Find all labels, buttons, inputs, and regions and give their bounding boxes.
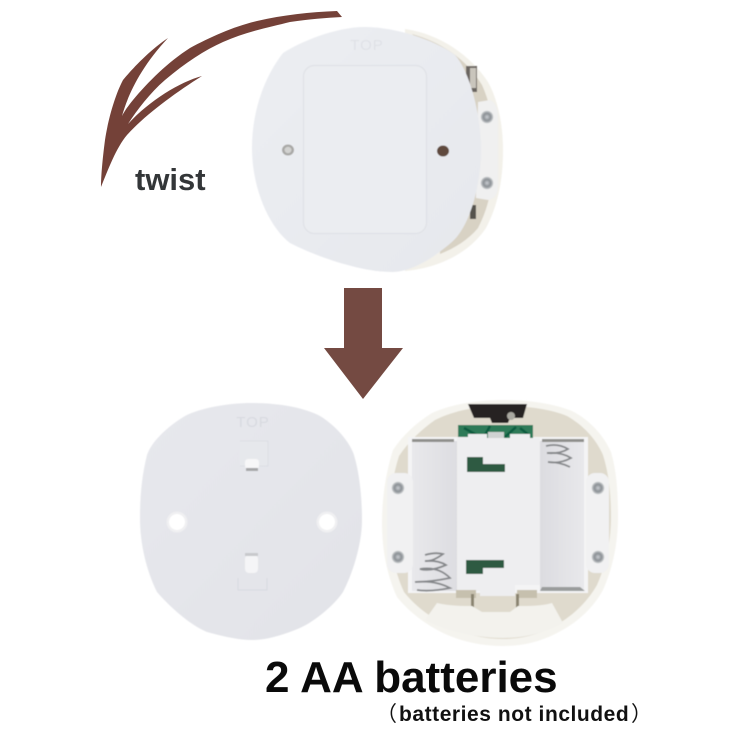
lower tab (245, 553, 258, 573)
sensor window (425, 603, 563, 638)
screw (392, 550, 404, 564)
down arrow (324, 288, 403, 399)
cover inset panel (304, 66, 426, 234)
screw (480, 176, 494, 190)
center lid (457, 434, 540, 596)
heading: 2 AA batteries: 2 AA batteries (265, 653, 558, 702)
twist label: twist (135, 162, 206, 197)
cover plate (252, 27, 481, 272)
lower slot (238, 578, 267, 590)
green circuit board (458, 425, 533, 438)
embossed TOP mark: TOP (236, 414, 270, 431)
embossed TOP mark: TOP (350, 37, 384, 54)
note: batteries not included: ） (631, 703, 653, 726)
opened battery compartment (382, 400, 618, 646)
upper tab (245, 459, 259, 471)
upper circuit window (467, 457, 505, 472)
lower circuit window (466, 560, 504, 574)
device with cover being twisted (252, 27, 503, 272)
right cover hole (437, 146, 449, 156)
lower left spring (415, 553, 450, 591)
screw (592, 550, 604, 564)
battery tray (408, 437, 588, 593)
left cover hole (282, 144, 294, 156)
screw (592, 482, 604, 494)
upper right spring (546, 445, 571, 467)
note: batteries not included: （ (376, 703, 398, 726)
note: batteries not included: batteries not included (399, 703, 629, 726)
inner well (389, 406, 611, 639)
lower right contact (540, 587, 585, 591)
mounting plate (140, 403, 362, 640)
side bracket (476, 100, 498, 200)
outer shell (382, 400, 618, 646)
left bracket (387, 473, 413, 573)
upper slot (240, 441, 268, 466)
black switch (468, 404, 527, 423)
device body behind cover (405, 29, 503, 271)
twist arrow (101, 11, 342, 187)
right plate hole (316, 512, 338, 532)
left plate hole (166, 512, 188, 532)
screw (392, 482, 404, 494)
battery peek (466, 66, 477, 92)
screw (480, 110, 494, 124)
right bracket (586, 473, 609, 573)
contact pins (456, 590, 537, 608)
